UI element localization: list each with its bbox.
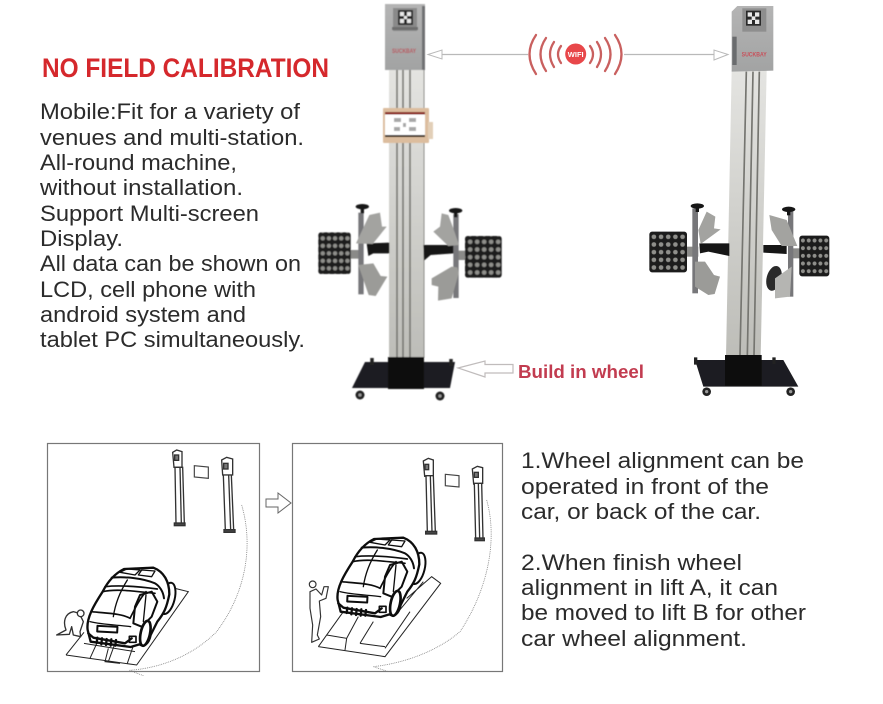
text block: operating notes: 1.Wheel alignment can be — [521, 448, 804, 473]
tower head: SUCKBAY — [742, 51, 767, 58]
panel: wheel alignment in front of car — [48, 444, 260, 676]
car — [87, 568, 178, 647]
panel: alignment on lift — [292, 444, 502, 672]
arrow: build in wheel — [458, 361, 513, 377]
text block: mobile features: All-round machine, — [40, 150, 237, 175]
text block: operating notes: alignment in lift A, it can — [521, 575, 778, 600]
tower two — [472, 466, 484, 541]
tower head — [385, 4, 425, 70]
dotted arc — [373, 500, 491, 671]
technician standing — [309, 581, 328, 642]
dotted arc — [129, 505, 247, 676]
text block: mobile features: android system and — [40, 302, 246, 327]
text block: mobile features: Mobile:Fit for a variety of — [40, 99, 301, 124]
text block: operating notes: 2.When finish wheel — [521, 550, 742, 575]
lift platform — [66, 588, 188, 665]
text block: mobile features: LCD, cell phone with — [40, 277, 256, 302]
panel frame — [48, 444, 260, 672]
tower two — [222, 457, 235, 532]
tower one — [173, 450, 185, 526]
text block: operating notes: car, or back of the car. — [521, 499, 761, 524]
text block: operating notes: be moved to lift B for other — [521, 600, 806, 625]
scene drawing — [309, 458, 491, 671]
text block: mobile features: All data can be shown on — [40, 251, 301, 276]
mechanic crouching — [57, 610, 84, 637]
tower base — [352, 357, 455, 400]
text block: mobile features: Support Multi-screen — [40, 201, 259, 226]
arrow: step to next panel — [266, 493, 291, 513]
scene drawing — [57, 450, 247, 676]
tower base — [695, 355, 798, 396]
wheel clamps and targets — [318, 204, 502, 301]
column — [726, 70, 767, 357]
tablet display — [383, 108, 433, 143]
tower one — [423, 458, 437, 534]
wheel clamps and targets — [649, 203, 829, 298]
target board — [445, 474, 459, 487]
text block: mobile features: Display. — [40, 226, 123, 251]
column — [389, 68, 424, 360]
icon: wifi signal — [530, 35, 622, 74]
arrow: wifi link to right tower — [624, 50, 728, 60]
text block: operating notes — [521, 448, 806, 651]
icon: wifi signal: WIFI — [568, 50, 584, 59]
lift platform — [318, 577, 441, 657]
text block: operating notes: car wheel alignment. — [521, 626, 747, 651]
tower head — [732, 6, 773, 72]
target board — [194, 466, 208, 478]
panel frame — [292, 444, 502, 672]
text block: mobile features — [39, 99, 305, 352]
label: build in wheel: Build in wheel — [518, 361, 644, 382]
text block: mobile features: without installation. — [39, 175, 243, 200]
car — [337, 538, 428, 617]
text block: mobile features: venues and multi-station. — [40, 125, 304, 150]
text block: mobile features: tablet PC simultaneously. — [40, 327, 305, 352]
right tower with wheel clamps — [649, 6, 829, 396]
arrow: wifi link to left tower — [428, 50, 528, 59]
tower head: SUCKBAY — [392, 48, 417, 55]
text block: operating notes: operated in front of the — [521, 474, 769, 499]
left tower with wheel clamps — [318, 4, 502, 400]
title: NO FIELD CALIBRATION — [42, 53, 329, 83]
